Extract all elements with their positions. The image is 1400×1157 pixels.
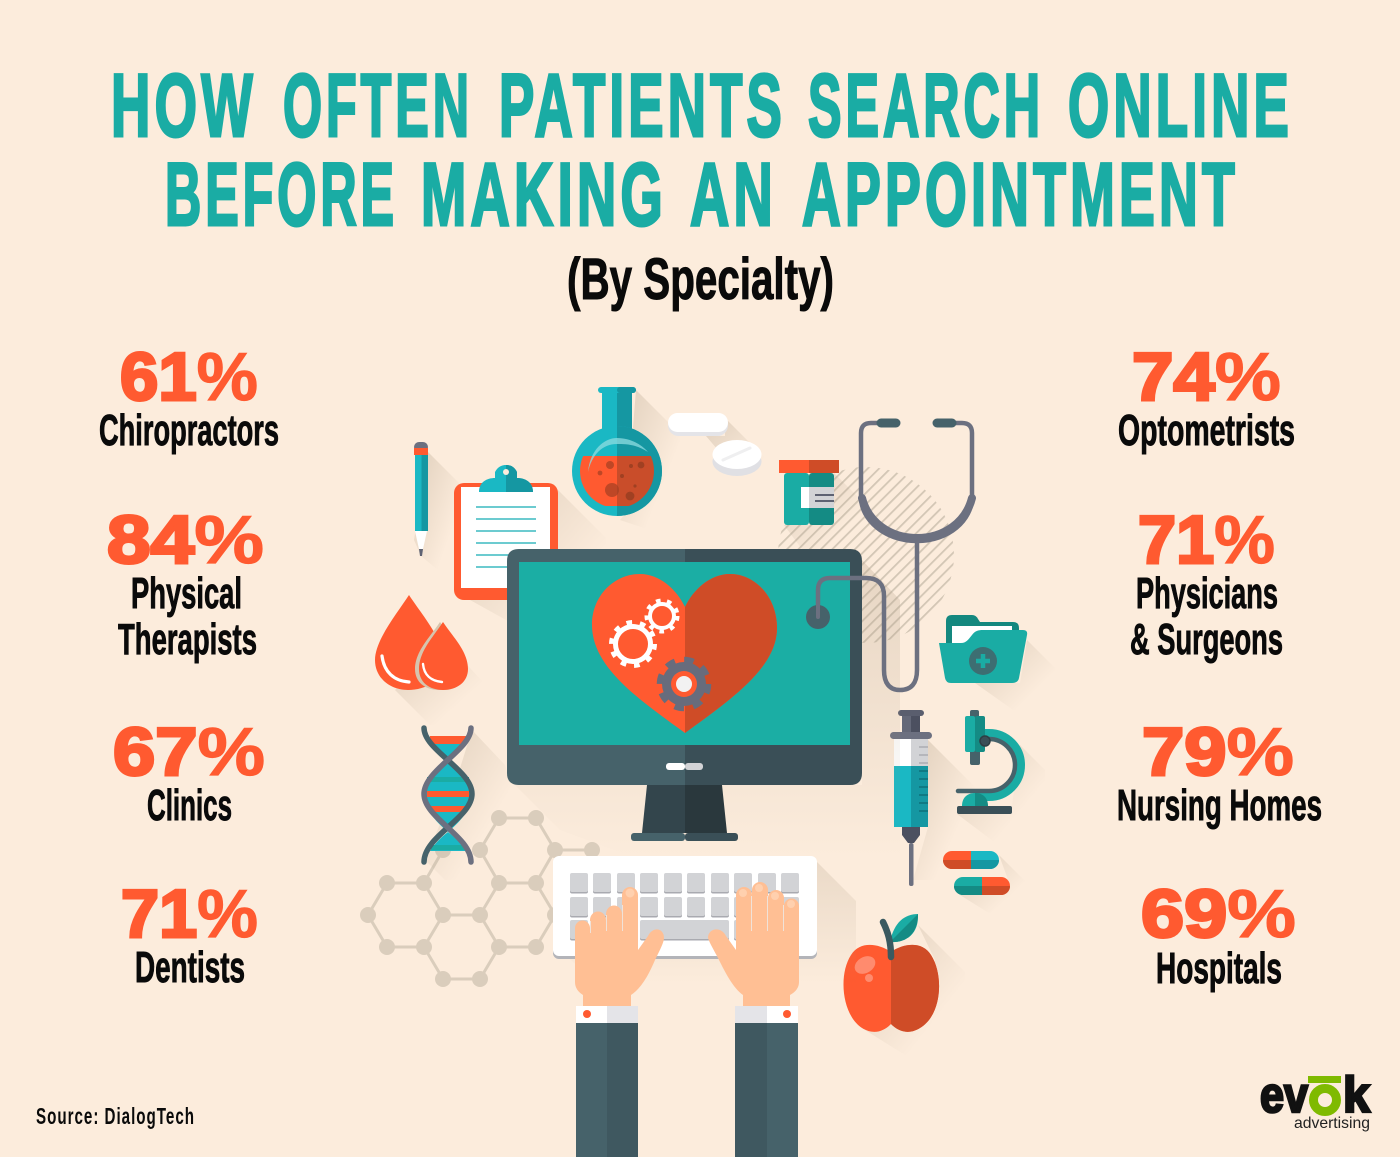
icon: white pills (668, 413, 785, 484)
icon: apple (844, 914, 950, 1041)
stat: physicians and surgeons: Physicians (1136, 569, 1278, 618)
stat: physicians and surgeons: 71% (1138, 502, 1275, 578)
keys (570, 873, 799, 940)
stat: hospitals: Hospitals (1156, 944, 1282, 993)
icon: folder (939, 615, 1058, 722)
large white gear (612, 623, 654, 665)
logo: evok advertising (1260, 1067, 1370, 1132)
icon: microscope (957, 710, 1045, 850)
stat: optometrists: 74% (1132, 339, 1281, 415)
icon: monitor (507, 549, 900, 860)
title: SEARCH (808, 55, 1044, 155)
icon: DNA helix (424, 728, 515, 880)
title: PATIENTS (499, 55, 786, 155)
icon: pencil (414, 442, 462, 590)
stat: physicians and surgeons (1130, 502, 1283, 664)
icon: clipboard (454, 465, 606, 650)
stat: physical therapists: Physical (131, 569, 242, 618)
icon: blood drops (375, 595, 495, 730)
stat: nursing homes: 79% (1142, 714, 1294, 790)
monitor long shadow (515, 560, 900, 860)
left statistics column (99, 339, 279, 992)
logo: evok advertising: advertising (1294, 1115, 1370, 1132)
icon: flask (572, 387, 668, 522)
stat: hospitals (1141, 876, 1296, 993)
gray gear (660, 660, 708, 708)
source note: Source: DialogTech (36, 1103, 195, 1129)
icon: syringe (890, 710, 975, 886)
stat: chiropractors (99, 339, 279, 455)
title: HOW (111, 55, 257, 155)
stat: optometrists (1118, 339, 1295, 455)
stat: clinics: Clinics (147, 781, 232, 830)
stat: optometrists: Optometrists (1118, 406, 1295, 455)
small white gear (647, 601, 677, 631)
stat: hospitals: 69% (1141, 876, 1296, 952)
icon: stethoscope (806, 423, 972, 690)
stat: physicians and surgeons: & Surgeons (1130, 615, 1283, 664)
title: AN (690, 144, 777, 244)
stat: physical therapists (107, 502, 264, 664)
stat: physical therapists: 84% (107, 502, 264, 578)
stat: physical therapists: Therapists (118, 615, 257, 664)
title: BEFORE (165, 144, 398, 244)
stand (631, 785, 738, 841)
logo: evok advertising: ev (1260, 1067, 1308, 1123)
stat: nursing homes (1117, 714, 1322, 830)
hexagon molecule background (360, 810, 600, 987)
title: MAKING (421, 144, 667, 244)
icon: capsules (943, 851, 1030, 920)
right hand and sleeve (708, 882, 799, 1157)
left hand and sleeve (575, 887, 664, 1157)
stat: clinics (113, 714, 265, 830)
stat: clinics: 67% (113, 714, 265, 790)
title (111, 55, 1293, 244)
stat: dentists (121, 876, 258, 992)
stat: chiropractors: 61% (120, 339, 258, 415)
keyboard (553, 856, 856, 985)
icon: medicine jar (779, 460, 872, 560)
title: OFTEN (283, 55, 473, 155)
logo: evok advertising: k (1343, 1067, 1370, 1123)
stat: dentists: 71% (121, 876, 258, 952)
right statistics column (1117, 339, 1322, 993)
stat: dentists: Dentists (135, 943, 245, 992)
subtitle: (By Specialty) (567, 247, 834, 312)
hatched circle backdrop (778, 467, 954, 643)
stat: chiropractors: Chiropractors (99, 406, 279, 455)
heart (592, 574, 777, 733)
